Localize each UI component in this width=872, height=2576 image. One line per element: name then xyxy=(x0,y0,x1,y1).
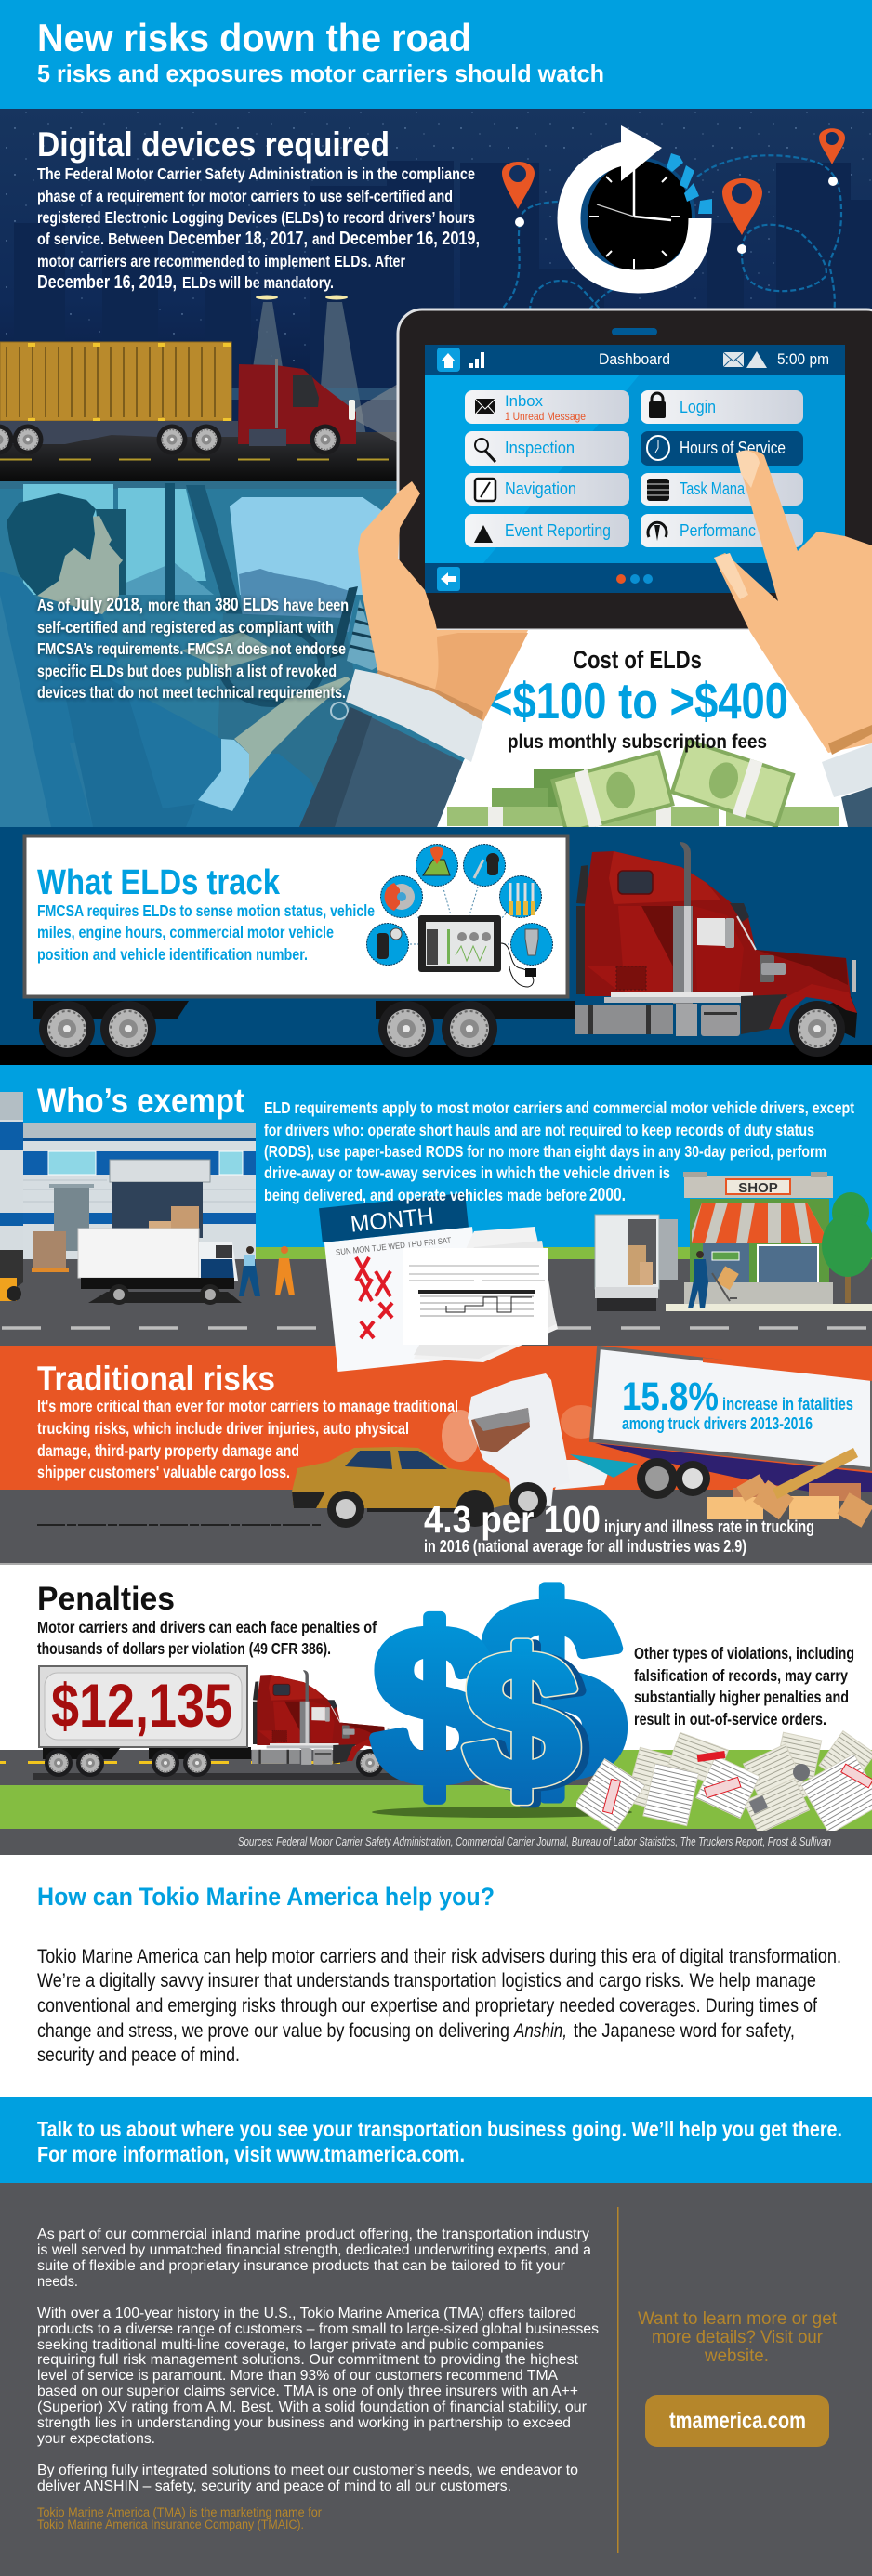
icon: home xyxy=(437,348,484,372)
warehouse building xyxy=(0,1092,256,1301)
status bar text: Dashboard xyxy=(599,350,670,368)
icon: map pins xyxy=(502,128,845,254)
icon: dollar signs: $ xyxy=(464,1612,579,1827)
shop sign: SHOP xyxy=(738,1180,778,1196)
text: month: MONTH xyxy=(350,1203,435,1238)
text: about paragraphs: suite of flexible and proprietary insurance products that can be tailored to fit your xyxy=(37,2258,565,2274)
button: inbox xyxy=(465,390,629,424)
stat: 4.3 per 100: injury and illness rate in trucking xyxy=(604,1518,814,1536)
heading: digital devices required: Digital devices required xyxy=(37,125,390,164)
button: hours of service xyxy=(641,431,803,466)
button: task manager xyxy=(641,473,803,506)
text: subscription fees: plus monthly subscription fees xyxy=(508,731,767,753)
text: compliance phase: and xyxy=(312,230,335,248)
text: July 2018 ELD count xyxy=(37,594,349,702)
road lane dashes xyxy=(2,1326,872,1330)
text: July 2018 ELD count: specific ELDs but does publish a list of revoked xyxy=(37,662,337,680)
side windows xyxy=(23,484,206,595)
text: other violations xyxy=(634,1644,854,1728)
dashboard xyxy=(214,613,390,827)
text: other violations: result in out-of-service orders. xyxy=(634,1710,826,1728)
calendar and log forms xyxy=(319,1192,558,1372)
text: about paragraphs: level of service is paramount. More than 93% of our customers recommend TMA xyxy=(37,2368,559,2384)
text: cost of ELDs: Cost of ELDs xyxy=(573,646,702,674)
stat: price range: <$100 to >$400 xyxy=(488,672,788,729)
button: login: Login xyxy=(680,398,716,416)
panel: how can Tokio Marine America help xyxy=(0,1855,872,2097)
text: traditional risks: trucking risks, which include driver injuries, auto physical xyxy=(37,1419,409,1438)
text: about paragraphs: deliver ANSHIN – safety, security and peace of mind to all our customers. xyxy=(37,2478,511,2494)
stat: 4.3 per 100 xyxy=(424,1498,814,1556)
rejected papers xyxy=(575,1731,872,1834)
button: inspection: Inspection xyxy=(505,439,575,457)
text: about paragraphs: products to a diverse range of customers – from small to large-sized global businesses xyxy=(37,2321,599,2337)
hands holding tablet xyxy=(299,450,872,827)
forklift xyxy=(0,1250,23,1299)
text: July 2018 ELD count: self-certified and registered as compliant with xyxy=(37,618,334,637)
text: about paragraphs xyxy=(37,2227,599,2494)
text: about paragraphs: based on our superior claims service. TMA is one of only three insurers with an A++ xyxy=(37,2384,578,2399)
heading: traditional risks: Traditional risks xyxy=(37,1360,275,1398)
text: compliance phase: December 16, 2019, xyxy=(37,271,177,293)
button: hours of service: Hours of Service xyxy=(680,439,786,457)
truck with container xyxy=(0,342,400,455)
header banner xyxy=(0,0,872,109)
text: about paragraphs: seeking traditional multi-line coverage, to larger private and public companies xyxy=(37,2337,544,2353)
button: performance xyxy=(641,514,803,547)
crushed car xyxy=(292,1447,511,1528)
text: July 2018 ELD count: 380 ELDs xyxy=(215,594,279,615)
icon: stopwatch with arrow xyxy=(569,125,712,282)
stat: 15.8 percent: 15.8% xyxy=(622,1374,719,1419)
text: about paragraphs: needs. xyxy=(37,2274,78,2290)
button: inbox: 1 Unread Message xyxy=(505,410,586,423)
red crosses xyxy=(356,1257,392,1338)
button: navigation: Navigation xyxy=(505,480,576,498)
text: exemptions xyxy=(264,1098,854,1205)
panel: digital devices required xyxy=(0,109,872,455)
steering wheel xyxy=(221,625,322,703)
text: penalties: Motor carriers and drivers can each face penalties of xyxy=(37,1618,377,1636)
icon cluster: tracked data xyxy=(366,844,552,987)
workers xyxy=(239,1246,295,1296)
text: July 2018 ELD count: July 2018, xyxy=(73,594,143,615)
shop sign xyxy=(726,1179,790,1196)
icon: dollar signs: $ xyxy=(477,1545,626,1833)
delivery truck xyxy=(78,1229,242,1305)
text: disclaimer: Tokio Marine America Insurance Company (TMAIC). xyxy=(37,2517,304,2531)
text: FMCSA requires xyxy=(37,901,375,964)
button: inbox: Inbox xyxy=(505,392,543,410)
text: penalties: thousands of dollars per violation (49 CFR 386). xyxy=(37,1639,331,1658)
device on dash xyxy=(330,586,381,670)
route lines xyxy=(495,155,841,321)
text: about paragraphs: requiring full risk management solutions. Our commitment to providing the highest xyxy=(37,2352,579,2368)
button: event reporting xyxy=(465,514,629,547)
street lamps xyxy=(250,296,368,446)
text: about paragraphs: By offering fully integrated solutions to meet our customer’s needs, we endeavor to xyxy=(37,2463,578,2478)
clock time: 5:00 pm xyxy=(777,350,829,368)
screen xyxy=(425,345,845,593)
button: login xyxy=(641,390,803,424)
right hand xyxy=(714,450,872,827)
rear-loaded box truck xyxy=(595,1215,678,1311)
panel: company information xyxy=(0,2183,872,2576)
text: about paragraphs: is well served by unmatched financial strength, dedicated underwriting experts, and a xyxy=(37,2242,591,2258)
text: about paragraphs: (Superior) XV rating from A.M. Best. With a solid foundation of financial stability, our xyxy=(37,2399,587,2415)
text: about paragraphs: strength lies in understanding your business and working in partnership to exceed xyxy=(37,2415,571,2431)
panel: call to action xyxy=(0,2097,872,2183)
stat: fine amount: $12,135 xyxy=(51,1671,232,1740)
text: compliance phase: December 16, 2019, xyxy=(339,228,480,249)
button: tmamerica.com: tmamerica.com xyxy=(669,2408,806,2434)
button: tmamerica.com xyxy=(645,2395,829,2447)
button: task manager: Task Mana xyxy=(680,480,746,498)
button: navigation xyxy=(465,473,629,506)
striped awning xyxy=(692,1203,826,1243)
mini tablet xyxy=(418,915,536,987)
text: traditional risks: shipper customers' valuable cargo loss. xyxy=(37,1463,290,1481)
road at night xyxy=(0,432,872,481)
text: compliance phase: December 18, 2017, xyxy=(168,228,308,249)
subtitle: 5 risks and exposures motor carriers should watch xyxy=(37,59,604,87)
truck with fine amount xyxy=(33,1666,400,1780)
text: July 2018 ELD count: have been xyxy=(284,596,349,614)
text: July 2018 ELD count: FMCSA’s requirements. FMCSA does not endorse xyxy=(37,639,346,658)
text: compliance phase: motor carriers are recommended to implement ELDs. After xyxy=(37,252,405,270)
panel: what ELDs track xyxy=(0,827,872,1065)
trailer xyxy=(591,1347,872,1469)
text: about paragraphs: With over a 100-year history in the U.S., Tokio Marine America (TMA) offers tailored xyxy=(37,2306,576,2321)
text: compliance phase: registered Electronic Logging Devices (ELDs) to record drivers’ hours xyxy=(37,208,475,227)
stat: 4.3 per 100: in 2016 (national average for all industries was 2.9) xyxy=(424,1537,746,1556)
tablet xyxy=(398,309,872,630)
text: want to learn more: website. xyxy=(704,2346,769,2366)
text: traditional risks: damage, third-party property damage and xyxy=(37,1441,299,1460)
text: compliance phase: phase of a requirement for motor carriers to use self-certified and xyxy=(37,187,453,205)
icon: dollar signs: $ xyxy=(464,1612,579,1827)
text: disclaimer xyxy=(37,2505,322,2531)
city skyline xyxy=(14,161,872,455)
text: exemptions: drive-away or tow-away services in which the vehicle driven is xyxy=(264,1163,670,1182)
icon: dollar signs xyxy=(372,1545,632,1833)
text: about paragraphs: your expectations. xyxy=(37,2431,155,2447)
stat: 4.3 per 100: 4.3 per 100 xyxy=(424,1498,601,1541)
text: compliance phase: of service. Between xyxy=(37,230,164,248)
driver figure xyxy=(0,493,350,827)
text: disclaimer: Tokio Marine America (TMA) is the marketing name for xyxy=(37,2505,322,2519)
red semi truck xyxy=(33,842,857,1057)
stat: 15.8 percent: among truck drivers 2013-2016 xyxy=(622,1413,813,1433)
text: FMCSA requires: FMCSA requires ELDs to sense motion status, vehicle xyxy=(37,901,375,920)
text: traditional risks xyxy=(37,1397,458,1481)
text: want to learn more: more details? Visit our xyxy=(652,2328,824,2347)
button: performance: Performanc xyxy=(680,521,756,540)
crashed white cab xyxy=(468,1373,570,1519)
text: compliance phase xyxy=(37,164,480,293)
person with hand truck xyxy=(688,1259,708,1308)
broken cargo boxes xyxy=(707,1448,872,1528)
heading: what ELDs track: What ELDs track xyxy=(37,863,281,902)
icon: dollar signs: $ xyxy=(471,1614,587,1829)
trailer board xyxy=(24,836,567,996)
icon: dollar signs: $ xyxy=(372,1581,496,1830)
heading: who's exempt: Who’s exempt xyxy=(37,1082,244,1120)
panel: call to action: For more information, visit www.tmamerica.com. xyxy=(37,2142,465,2166)
button: event reporting: Event Reporting xyxy=(505,521,611,540)
text: digital transformation: security and peace of mind. xyxy=(37,2044,240,2066)
text: digital transformation xyxy=(37,1946,841,2066)
tree xyxy=(822,1192,872,1303)
text: FMCSA requires: miles, engine hours, commercial motor vehicle xyxy=(37,923,334,941)
log form xyxy=(403,1248,548,1345)
button: inspection xyxy=(465,431,629,466)
text: exemptions: being delivered, and operate vehicles made before xyxy=(264,1186,587,1204)
text: July 2018 ELD count: devices that do not meet technical requirements. xyxy=(37,683,346,702)
text: FMCSA requires: position and vehicle identification number. xyxy=(37,945,308,964)
shipping container xyxy=(0,342,231,422)
divider xyxy=(617,2207,619,2553)
text: digital transformation: change and stress, we prove our value by focusing on delivering xyxy=(37,2020,509,2042)
text: exemptions: 2000. xyxy=(589,1185,626,1205)
panel: cost of ELDs xyxy=(437,630,848,835)
crashed tractor-trailer xyxy=(442,1347,872,1499)
panel: who's exempt xyxy=(0,1065,872,1346)
panel: driver scene xyxy=(0,481,465,827)
heading: how can TMA help: How can Tokio Marine America help you? xyxy=(37,1883,495,1911)
road dashes xyxy=(0,459,400,461)
stat: 15.8 percent xyxy=(622,1374,853,1433)
text: want to learn more: Want to learn more or get xyxy=(638,2309,838,2329)
shop storefront xyxy=(666,1172,872,1311)
text: want to learn more xyxy=(638,2309,838,2366)
skid marks xyxy=(37,1524,321,1526)
text: digital transformation: the Japanese word for safety, xyxy=(574,2020,795,2042)
text: traditional risks: It's more critical than ever for motor carriers to manage traditional xyxy=(37,1397,458,1415)
text: digital transformation: Anshin, xyxy=(512,2020,567,2042)
icon: mail and alert xyxy=(723,351,767,368)
text: July 2018 ELD count: more than xyxy=(148,596,211,614)
title: New risks down the road xyxy=(37,16,471,59)
left hand xyxy=(299,481,528,827)
text: compliance phase: The Federal Motor Carrier Safety Administration is in the compliance xyxy=(37,164,475,183)
windshield and mountains xyxy=(230,497,395,632)
smoke xyxy=(442,1410,479,1462)
text: penalties xyxy=(37,1618,377,1658)
money pile xyxy=(447,739,839,835)
back button and page dots xyxy=(437,567,653,591)
text: July 2018 ELD count: As of xyxy=(37,596,70,614)
text: about paragraphs: As part of our commercial inland marine product offering, the transportation industry xyxy=(37,2227,589,2242)
text: weekdays: SUN MON TUE WED THU FRI SAT xyxy=(336,1235,452,1257)
panel: penalties xyxy=(0,1582,872,1855)
heading: penalties: Penalties xyxy=(37,1581,175,1617)
text: compliance phase: ELDs will be mandatory. xyxy=(182,273,334,292)
panel: traditional risks xyxy=(0,1192,872,1565)
